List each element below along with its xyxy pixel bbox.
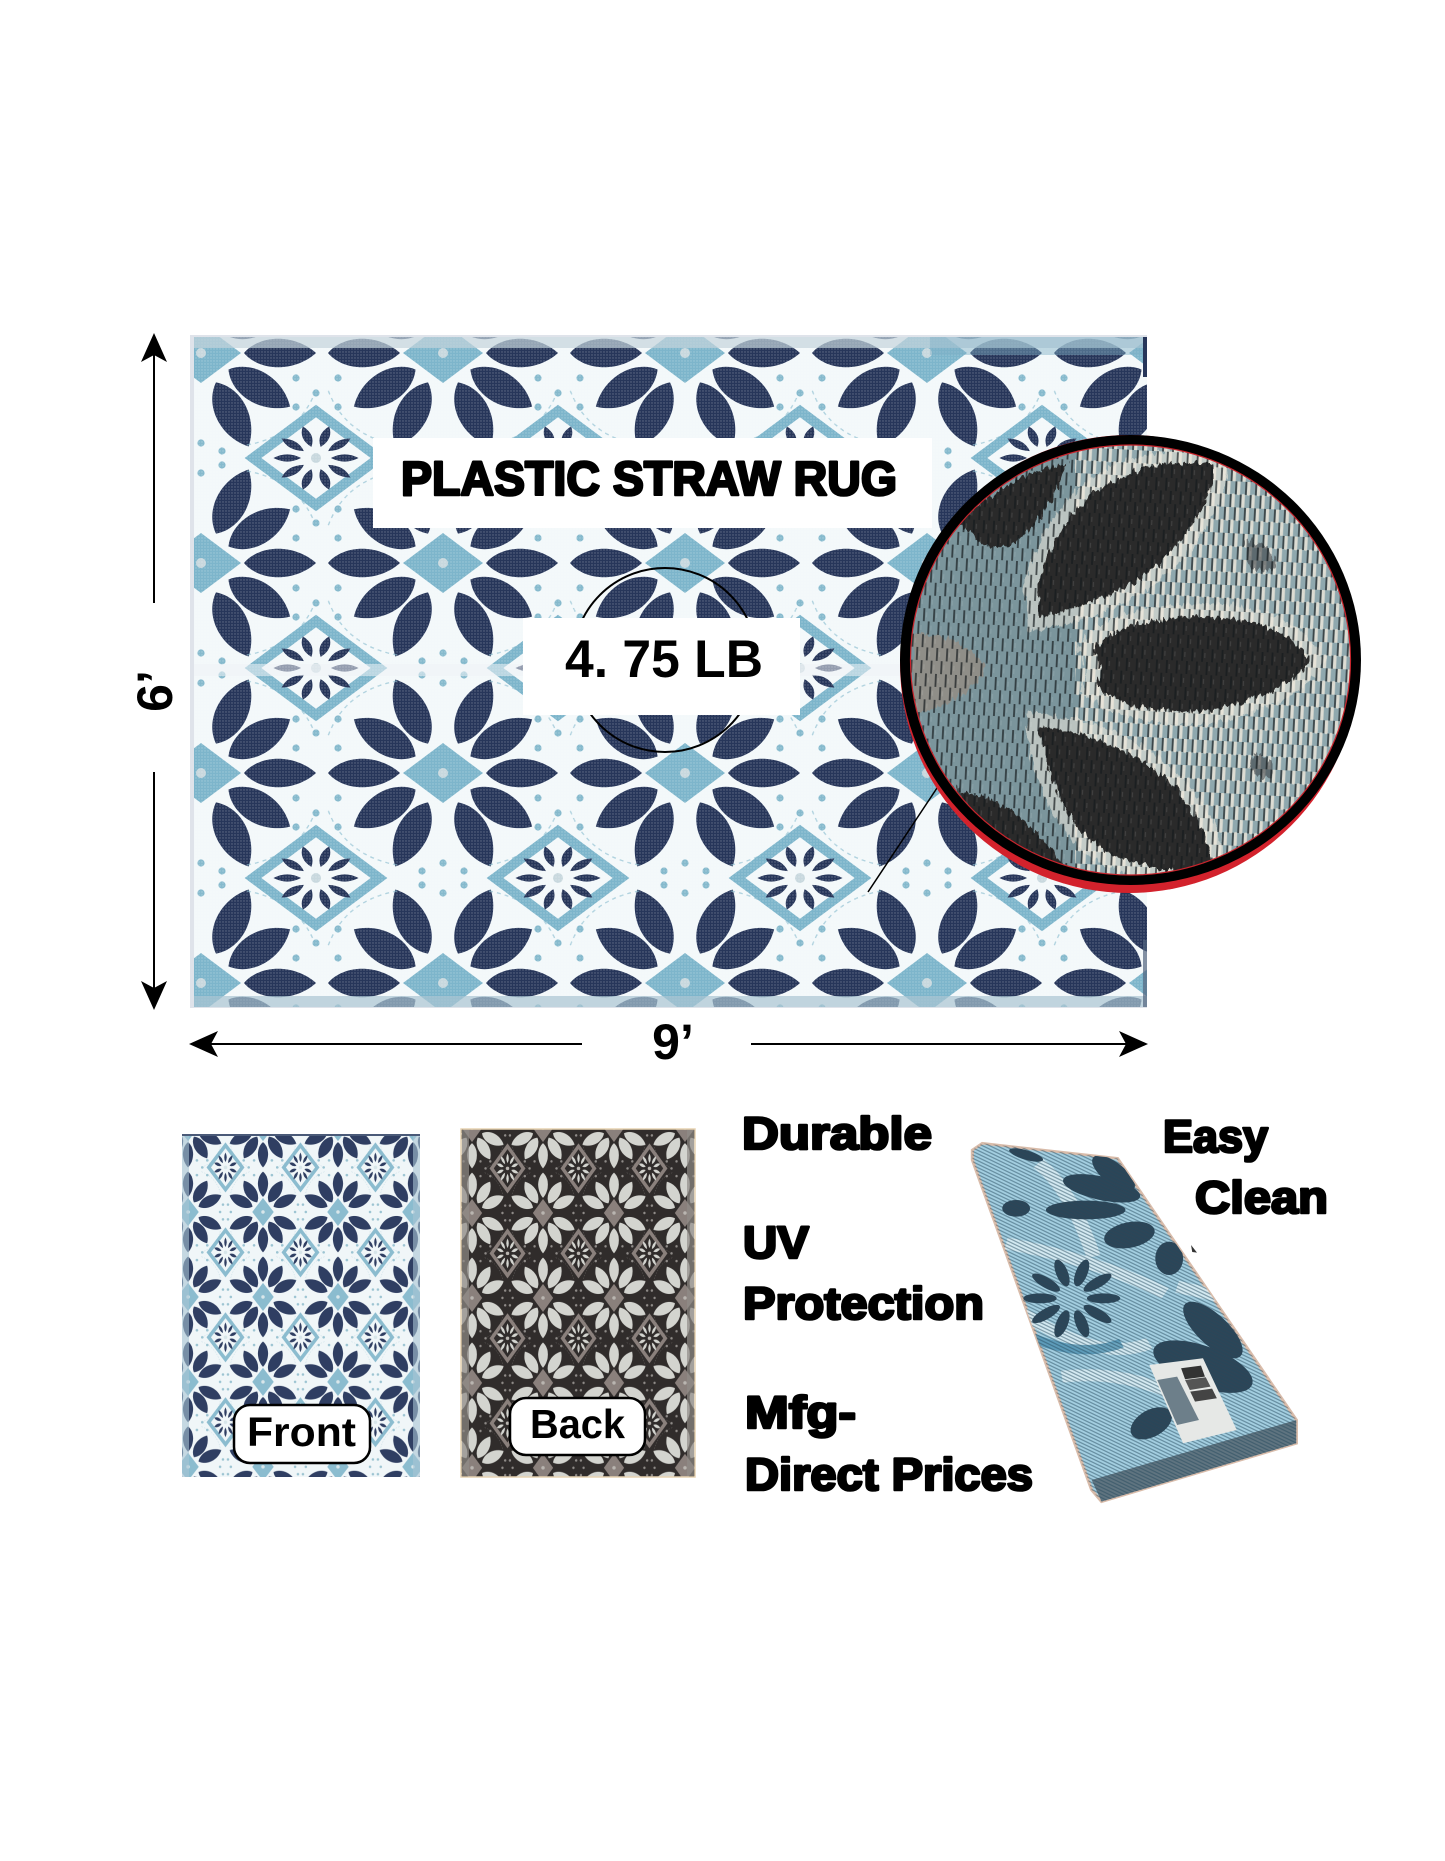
feature: manufacturer direct prices <box>745 1387 1033 1500</box>
leader line to magnifier <box>868 748 960 892</box>
panel: main rug with pattern <box>190 335 1147 1008</box>
arrow: height down <box>141 772 167 1010</box>
feature: easy clean <box>1163 1111 1328 1223</box>
feature: manufacturer direct prices: Direct Prices <box>745 1449 1033 1500</box>
feature: easy clean: Easy <box>1163 1111 1268 1162</box>
label: back: Back <box>530 1401 625 1447</box>
feature: durable: Durable <box>742 1108 932 1159</box>
feature: UV protection: Protection <box>743 1278 984 1329</box>
feature: manufacturer direct prices: Mfg- <box>745 1387 856 1438</box>
feature: UV protection <box>743 1217 984 1329</box>
arrow: height up <box>141 333 167 603</box>
label: front: Front <box>247 1409 356 1455</box>
panel: front view <box>182 1134 420 1477</box>
panel: back view <box>461 1129 695 1477</box>
label: back <box>510 1398 645 1455</box>
label: height 6 feet: 6’ <box>127 670 183 712</box>
product label on package <box>1149 1358 1237 1443</box>
callout: weight <box>523 618 800 715</box>
label: width 9 feet: 9’ <box>652 1014 694 1070</box>
callout: weight: 4. 75 LB <box>565 630 763 689</box>
arrow: width right <box>751 1031 1148 1057</box>
feature: UV protection: UV <box>743 1217 809 1268</box>
product photo: folded rug package <box>970 1142 1298 1504</box>
label: front <box>234 1405 370 1463</box>
feature: easy clean: Clean <box>1195 1172 1328 1223</box>
panel: magnified weave circle <box>900 435 1362 893</box>
weight callout ring <box>573 568 757 752</box>
title: plastic straw rug <box>373 438 932 528</box>
title: plastic straw rug: PLASTIC STRAW RUG <box>401 453 897 506</box>
arrow: width left <box>189 1031 582 1057</box>
